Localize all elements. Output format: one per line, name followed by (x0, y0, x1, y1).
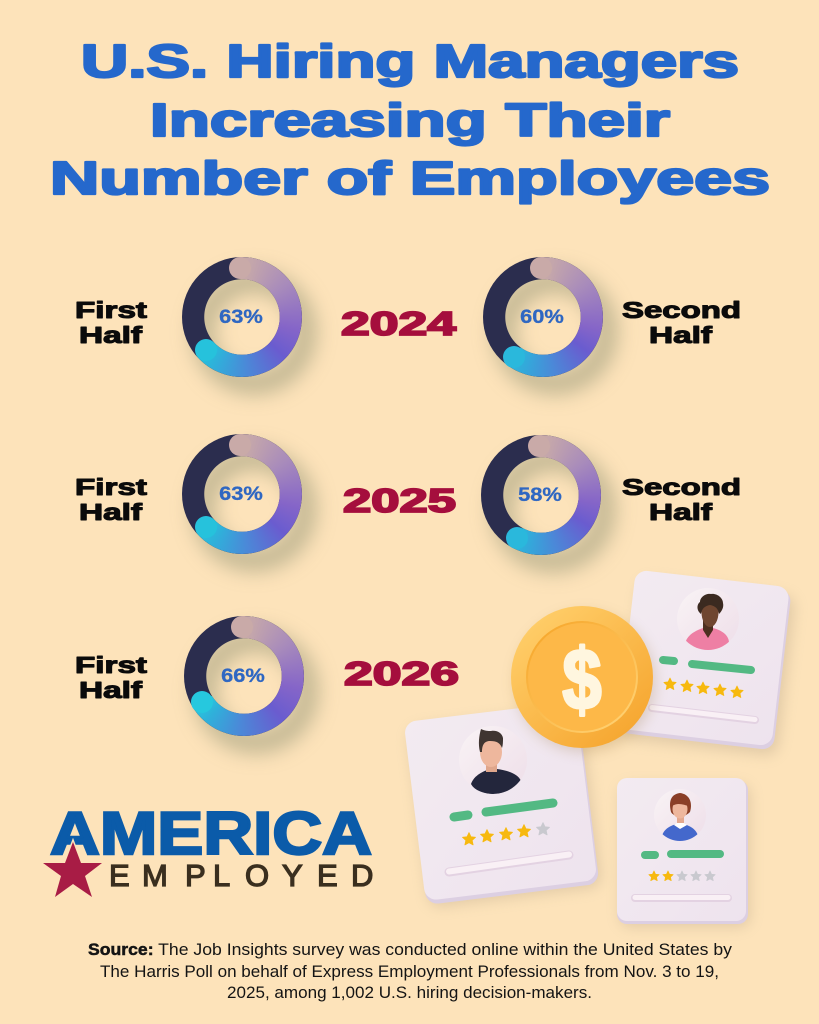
donut: 2024 second half 60%: 60% (520, 306, 564, 328)
icon: dollar coin (511, 606, 655, 752)
year 2025: 2025 (343, 482, 456, 519)
label: 2024 second half: Half (649, 322, 712, 348)
year 2026: 2026 (344, 655, 459, 692)
label: 2024 second half (622, 297, 741, 348)
label: 2025 first half: Half (79, 499, 142, 525)
source note (88, 941, 733, 1002)
label: 2025 first half (75, 474, 147, 525)
donut: 2025 first half 63%: 63% (219, 483, 263, 505)
label: 2026 first half (75, 652, 147, 703)
card: top right candidate (617, 570, 796, 756)
title: Increasing Their (150, 94, 670, 146)
source note: Source: The Job Insights survey was conducted online within the United States by (88, 941, 733, 959)
dollar sign: $ (562, 631, 602, 728)
title: Number of Employees (50, 152, 770, 204)
donut: 2025 second half 58%: 58% (518, 484, 562, 506)
label: 2025 second half: Half (649, 499, 712, 525)
donut: 2024 second half 60% (483, 257, 627, 404)
title: U.S. Hiring Managers (81, 35, 739, 87)
logo wordmark: America: AMERICA (50, 800, 372, 867)
donut: 2025 first half 63% (182, 434, 326, 581)
label: 2025 first half: First (75, 474, 147, 500)
year 2024: 2024 (341, 305, 457, 342)
donut: 2025 second half 58% (481, 435, 625, 582)
title (50, 35, 770, 204)
label: 2025 second half (622, 474, 741, 525)
donut: 2026 first half 66%: 66% (221, 665, 265, 687)
donut: 2024 first half 63%: 63% (219, 306, 263, 328)
illustration: candidate cards and coin (404, 570, 796, 927)
logo: America Employed (43, 800, 373, 897)
label: 2024 second half: Second (622, 297, 741, 323)
donut: 2024 first half 63% (182, 257, 326, 404)
source note: The Harris Poll on behalf of Express Employment Professionals from Nov. 3 to 19, (100, 963, 719, 981)
label: 2024 first half: First (75, 297, 147, 323)
logo star (43, 842, 102, 897)
source note: 2025, among 1,002 U.S. hiring decision-makers. (227, 984, 592, 1002)
logo wordmark: Employed: EMPLOYED (109, 858, 373, 893)
label: 2026 first half: First (75, 652, 147, 678)
label: 2024 first half (75, 297, 147, 348)
label: 2025 second half: Second (622, 474, 741, 500)
label: 2026 first half: Half (79, 677, 142, 703)
card: left candidate (404, 701, 602, 908)
donut: 2026 first half 66% (184, 616, 328, 763)
card: lower right candidate (617, 778, 750, 927)
label: 2024 first half: Half (79, 322, 142, 348)
